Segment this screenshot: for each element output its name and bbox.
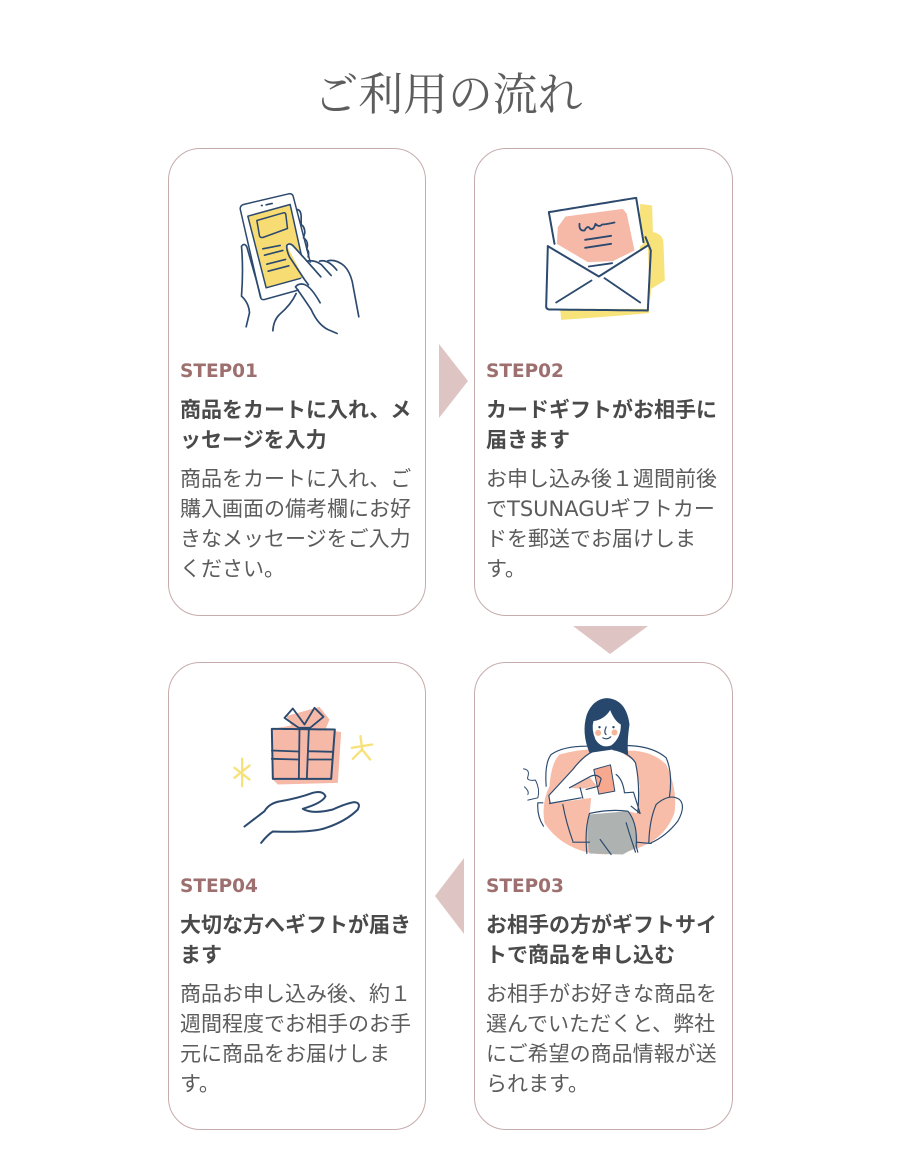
arrow: step 01 to step 02 [439,344,468,418]
step description: お申し込み後１週間前後 [486,467,717,491]
step description: す。 [180,1072,220,1096]
step description [180,467,411,581]
step label: STEP01 [180,361,258,382]
step heading: ます [180,943,222,967]
icon: envelope with card [545,196,665,320]
step heading: ッセージを入力 [180,428,327,452]
icon: gift over open hand [233,706,374,844]
step heading [486,398,717,452]
step heading: お相手の方がギフトサイ [486,913,717,937]
step heading: 届きます [486,428,570,452]
step description: 週間程度でお相手のお手 [180,1012,411,1036]
step description: にご希望の商品情報が送 [486,1042,717,1066]
icon: woman on sofa using smartphone [523,698,683,856]
step heading: トで商品を申し込む [486,943,675,967]
icon: hands holding smartphone [239,193,360,334]
step label: STEP03 [486,876,564,897]
step description: 購入画面の備考欄にお好 [180,497,411,521]
step heading: 商品をカートに入れ、メ [180,398,411,422]
panel: step 02 [474,148,733,616]
step description: す。 [486,557,526,581]
arrow: step 03 to step 04 [435,858,464,934]
step description: お相手がお好きな商品を [486,982,717,1006]
step description [486,467,717,581]
panel: step 01 [168,148,426,616]
step description: きなメッセージをご入力 [180,527,411,551]
step description: 元に商品をお届けしま [180,1042,390,1066]
step description: られます。 [486,1072,589,1096]
step heading [180,398,411,452]
step heading [486,913,717,967]
step description [486,982,717,1096]
step description: 商品お申し込み後、約１ [180,982,411,1006]
step description [180,982,411,1096]
step label: STEP02 [486,361,564,382]
panel: step 04 [168,662,426,1130]
step description: ください。 [180,557,285,581]
panel: step 03 [474,662,733,1130]
step description: 商品をカートに入れ、ご [180,467,411,491]
step label: STEP04 [180,876,258,897]
step heading [180,913,411,967]
step heading: カードギフトがお相手に [486,398,717,422]
step heading: 大切な方へギフトが届き [180,913,411,937]
step description: 選んでいただくと、弊社 [486,1012,715,1036]
arrow: step 02 to step 03 [573,626,648,654]
step description: ドを郵送でお届けしま [486,527,696,551]
step description: でTSUNAGUギフトカー [486,497,715,521]
title: ご利用の流れ [314,70,582,120]
